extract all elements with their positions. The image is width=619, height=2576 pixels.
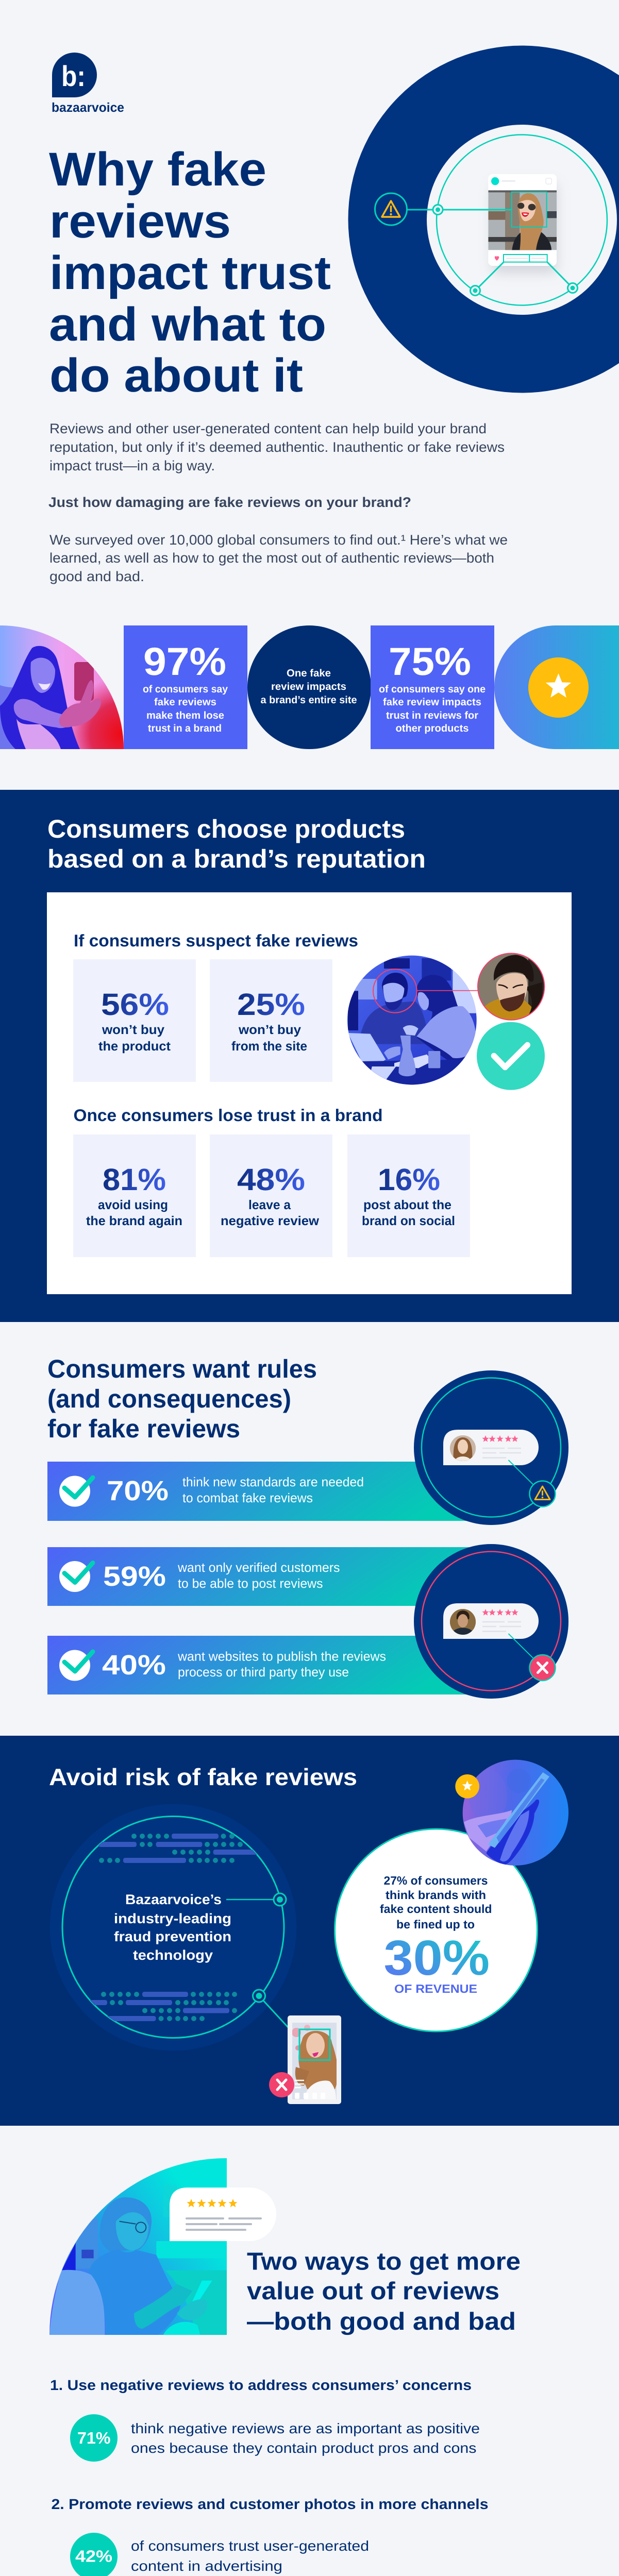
stat 97% [124,625,247,749]
icon: x badge [530,1655,556,1681]
heading: Consumers want rules [47,1354,317,1383]
stat 71%: ones because they contain product pros and cons [131,2440,476,2456]
stat 97%: fake reviews [154,697,216,708]
subheading one: If consumers suspect fake reviews [74,931,358,950]
header: logo: b: [61,60,86,92]
fine circle: OF REVENUE [394,1982,477,1995]
stat 97%: make them lose [146,710,224,721]
stat 25%: 25% [237,987,305,1022]
stat 97%: trust in a brand [148,723,222,734]
header: logo: bazaarvoice [52,100,124,115]
bar 40%: process or third party they use [178,1665,349,1680]
hero illustration: circle with review post [348,45,619,393]
subheading two: Once consumers lose trust in a brand [73,1106,382,1125]
stat 75%: 75% [389,640,471,684]
label: fraud prevention [114,1929,231,1944]
header: logo [52,53,124,115]
photo: woman taking selfie [0,625,124,749]
phone with flagged photo [269,2015,341,2104]
data dots [88,1834,260,2021]
section: reputation [0,790,619,1322]
heading: (and consequences) [47,1384,291,1413]
stat 16% [347,1134,470,1257]
circle callout: a brand’s entire site [261,694,357,706]
intro text: good and bad. [49,569,144,584]
bar 59%: to be able to post reviews [178,1577,323,1591]
heading: Two ways to get more [247,2248,521,2275]
heading [247,2248,521,2335]
fraud prevention circle [49,1804,300,2050]
icon: warning badge [530,1481,556,1506]
icon: x badge [269,2072,294,2097]
heading: for fake reviews [47,1414,240,1443]
stat 56%: won’t buy [102,1023,164,1037]
phone post with portrait [488,174,557,266]
heading: value out of reviews [247,2278,499,2305]
stat 56% [73,959,196,1082]
stat 48% [210,1134,332,1257]
fine circle: think brands with [386,1888,486,1902]
photo: couple at laptop [343,953,545,1090]
way one heading: 1. Use negative reviews to address consumers’ concerns [50,2377,472,2393]
stat 56%: 56% [101,987,169,1022]
review card [443,1430,539,1465]
title: Why fake [49,143,266,196]
bar 59% [47,1547,491,1606]
stat 71%: 71% [77,2429,110,2447]
bar 70%: to combat fake reviews [182,1491,313,1505]
man close-up [477,953,545,1022]
stat 75%: trust in reviews for [386,710,478,721]
stat 71%: think negative reviews are as important as positive [131,2420,480,2436]
stat 25% [210,959,332,1082]
stat 48%: 48% [237,1162,305,1197]
intro text: Just how damaging are fake reviews on your brand? [48,495,411,510]
stat 56%: the product [98,1039,171,1054]
stat 75%: other products [396,723,469,734]
stat 97%: 97% [143,640,226,684]
circle callout [247,625,371,749]
circle: flagged review [414,1370,568,1525]
stat 75%: of consumers say one [379,684,486,695]
icon: star badge [455,1774,479,1799]
white panel [47,892,572,1294]
heading: based on a brand’s reputation [47,844,426,873]
photo: woman with tablet [46,2154,228,2335]
review card [443,1603,539,1639]
stat 81%: avoid using [98,1198,168,1212]
heading [47,815,426,873]
fine circle: 30% [383,1930,490,1986]
stat 81%: the brand again [86,1214,182,1228]
bar 59%: 59% [103,1561,166,1592]
warning icon [375,193,407,225]
intro text: reputation, but only if it’s deemed authentic. Inauthentic or fake reviews [49,439,505,455]
circle callout: review impacts [271,681,346,692]
stat 71% [70,2414,480,2462]
label: technology [133,1947,213,1963]
man face inside photo [382,973,408,1010]
stat 42% [70,2533,369,2576]
stat 16%: 16% [378,1162,440,1197]
intro text: Reviews and other user-generated content can help build your brand [49,421,487,436]
section: two ways [46,2154,521,2576]
stat 16%: post about the [363,1198,451,1212]
intro text: impact trust—in a big way. [49,458,215,473]
photo: hand holding phone [455,1759,568,1866]
bar 70% [47,1462,491,1521]
stat 42%: content in advertising [131,2558,282,2574]
label: Bazaarvoice’s [125,1892,222,1907]
intro text: We surveyed over 10,000 global consumers to find out.¹ Here’s what we [49,532,508,548]
fine circle: fake content should [380,1902,492,1916]
stat 75%: fake review impacts [383,697,481,708]
title: do about it [49,349,303,402]
fine circle [335,1829,537,2031]
title: and what to [49,298,326,351]
heading: —both good and bad [247,2308,516,2335]
stat 81%: 81% [103,1162,166,1197]
circle callout: One fake [287,668,331,679]
stat 75% [371,625,494,749]
fine circle: be fined up to [396,1918,475,1931]
heading [47,1354,317,1443]
section: rules [47,1354,568,1699]
fine circle: 27% of consumers [383,1874,488,1887]
title: impact trust [49,247,331,299]
icon: check [477,1022,545,1090]
bar 40% [47,1636,491,1694]
title [49,143,331,402]
heading: Consumers choose products [47,815,405,843]
stat 25%: from the site [231,1039,307,1054]
stat 42%: of consumers trust user-generated [131,2538,369,2554]
stat 81% [73,1134,196,1257]
bar 70%: think new standards are needed [182,1475,364,1489]
way two heading: 2. Promote reviews and customer photos in more channels [52,2496,489,2512]
stat 97%: of consumers say [143,684,228,695]
bar 59%: want only verified customers [177,1561,340,1575]
stat 48%: negative review [221,1214,320,1228]
stat 25%: won’t buy [238,1023,301,1037]
label [114,1892,231,1963]
intro text [48,421,508,584]
intro text: learned, as well as how to get the most out of authentic reviews—both [49,550,494,566]
stat 16%: brand on social [362,1214,455,1228]
label: industry-leading [114,1911,231,1926]
bar 70%: 70% [107,1476,169,1506]
star shape [494,625,619,749]
stat 48%: leave a [248,1198,291,1212]
stat 42%: 42% [75,2547,112,2566]
bar 40%: want websites to publish the reviews [177,1650,386,1664]
title: reviews [49,195,231,248]
heading: Avoid risk of fake reviews [49,1764,357,1790]
review card [170,2188,276,2241]
bar 40%: 40% [102,1650,166,1681]
section: avoid risk [0,1736,619,2126]
stat strip [0,625,619,749]
circle: rejected review [414,1544,568,1699]
